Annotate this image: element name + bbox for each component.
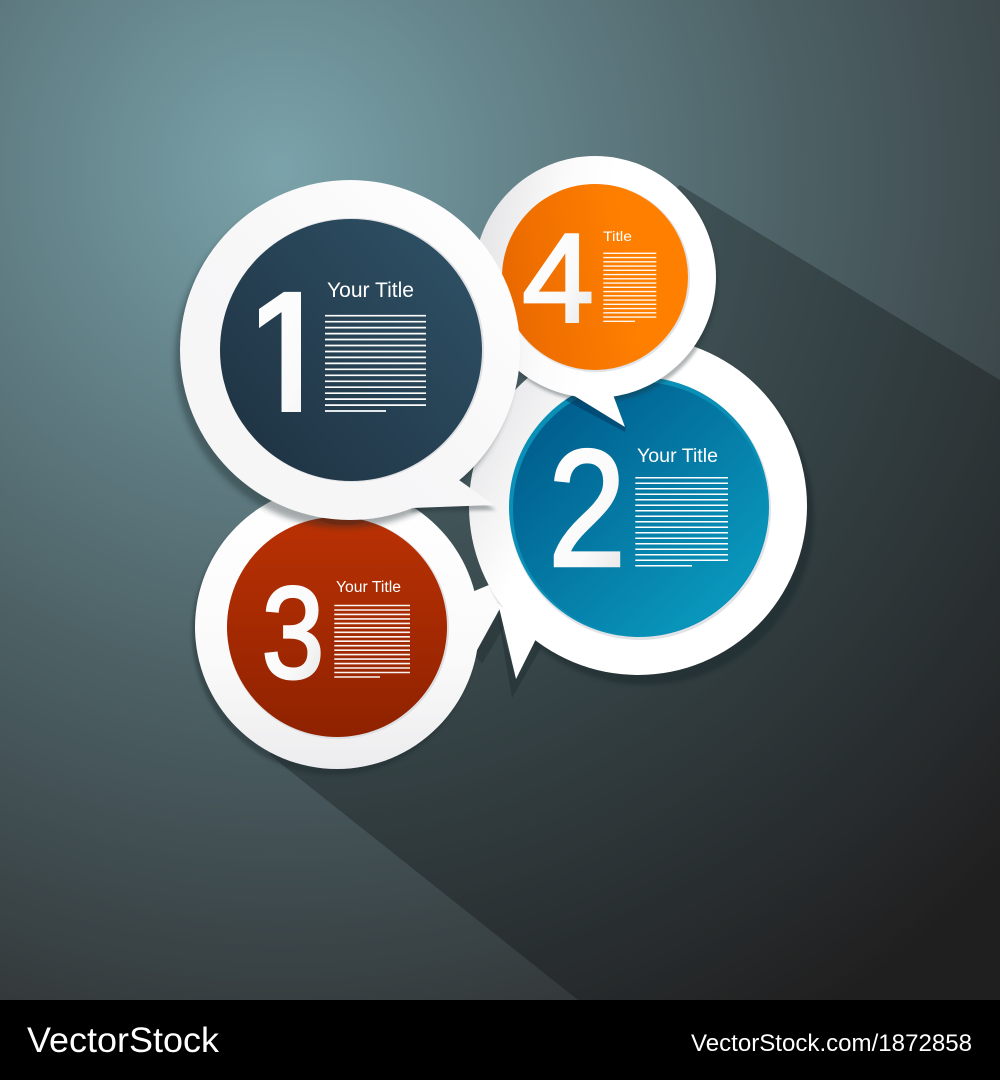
title: Your Title (327, 279, 414, 302)
red disc (227, 517, 447, 737)
brand wordmark: VectorStock (27, 1021, 220, 1060)
text lines (603, 253, 656, 321)
step 3 circle (191, 501, 504, 774)
orange disc (502, 184, 688, 370)
ring with pointer (195, 485, 520, 769)
footer bar (0, 1000, 1000, 1080)
text lines (334, 606, 410, 677)
ring with pointer (180, 180, 520, 520)
blue disc (509, 377, 769, 637)
numeral 3: 3 (262, 560, 324, 705)
title: Your Title (637, 446, 718, 467)
ring with pointer (474, 156, 716, 427)
numeral 2: 2 (548, 416, 626, 601)
navy disc (220, 219, 482, 481)
title: Your Title (336, 579, 401, 596)
text lines (325, 316, 426, 411)
step 2 circle (469, 337, 814, 698)
ring with pointer (469, 337, 807, 679)
title: Title (603, 228, 632, 244)
step 4 circle (474, 156, 718, 427)
text lines (635, 478, 728, 566)
image url: VectorStock.com/1872858 (691, 1030, 972, 1057)
step 1 circle (175, 180, 520, 528)
numeral 4: 4 (522, 208, 594, 348)
long shadow (270, 185, 1000, 1000)
numeral 1: 1 (233, 251, 343, 470)
